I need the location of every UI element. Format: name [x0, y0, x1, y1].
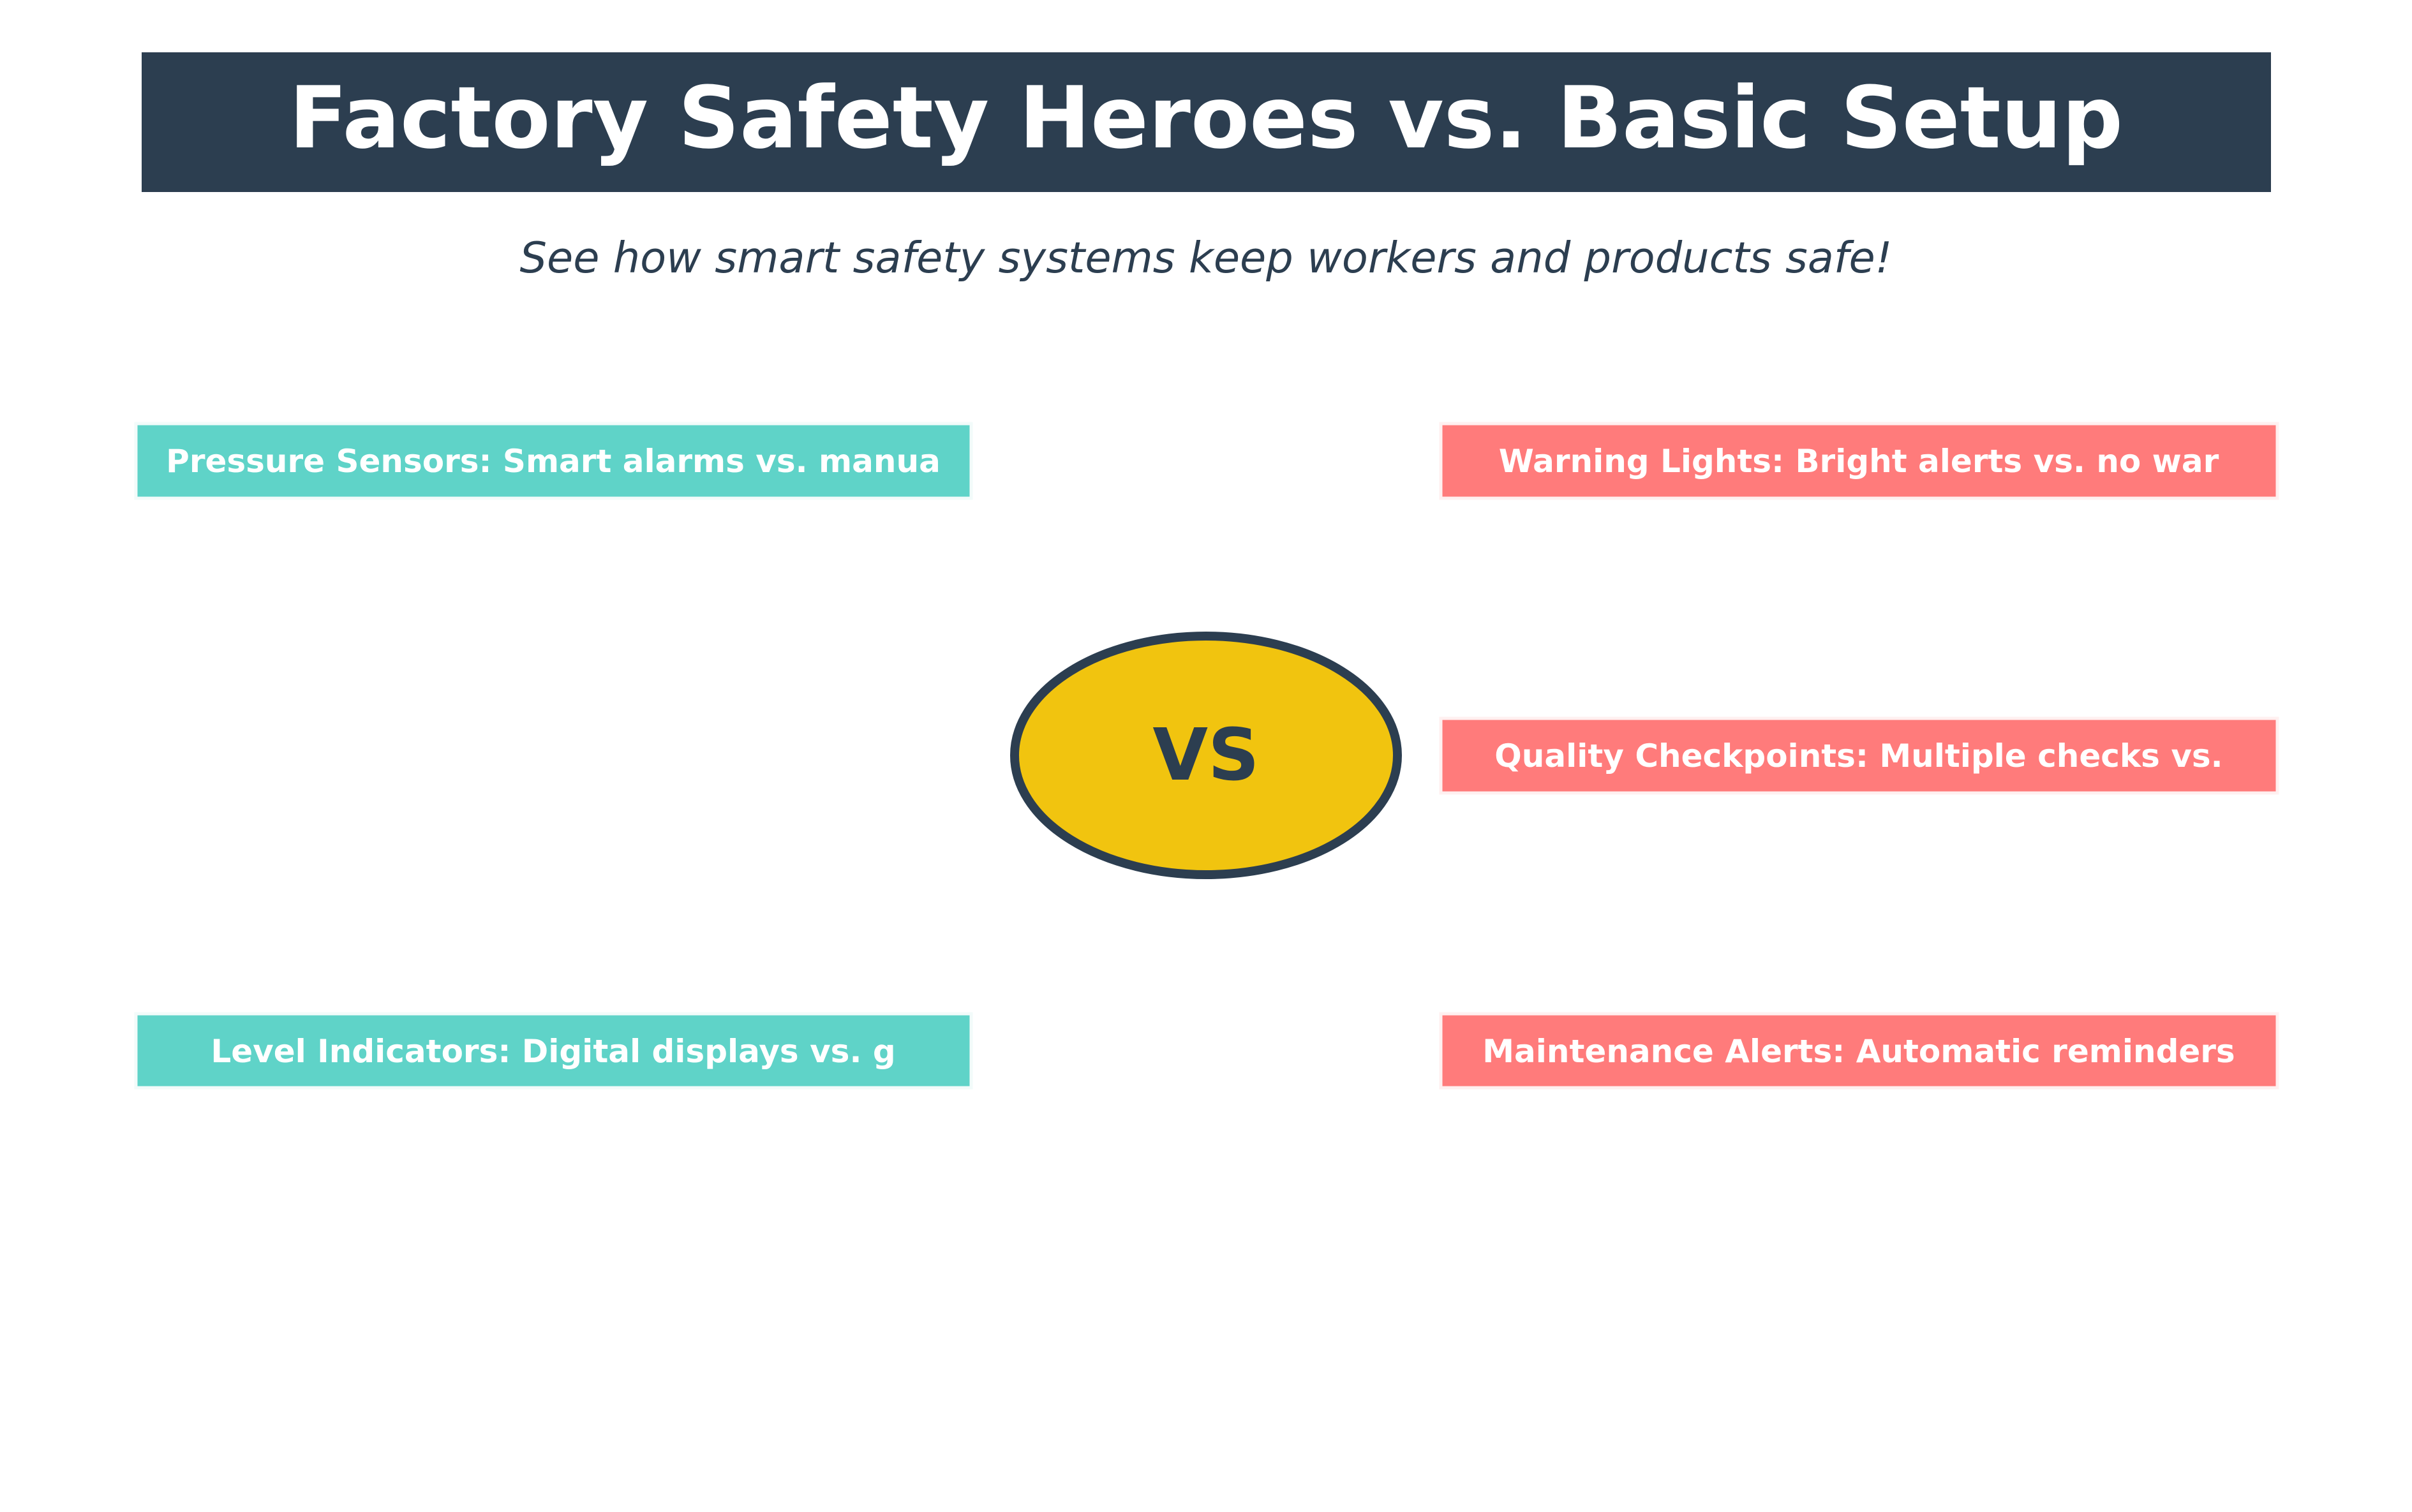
subtitle: See how smart safety systems keep workers and products safe! — [519, 233, 1893, 283]
label: level indicators — [136, 1014, 971, 1088]
label: warning lights — [1441, 424, 2277, 498]
title — [142, 52, 2271, 192]
panel: right labels — [1441, 424, 2277, 1088]
vs badge: VS — [1152, 714, 1260, 797]
label: quality checkpoints: Quality Checkpoints: Multiple checks vs. — [1494, 737, 2223, 775]
label: pressure sensors: Pressure Sensors: Smart alarms vs. manua — [166, 443, 941, 480]
label: maintenance alerts — [1441, 1014, 2277, 1088]
label: pressure sensors — [136, 424, 971, 498]
vs badge — [1015, 636, 1397, 875]
label: quality checkpoints — [1441, 718, 2277, 793]
panel: left labels — [136, 424, 971, 1088]
label: warning lights: Warning Lights: Bright alerts vs. no war — [1499, 443, 2219, 480]
title: Factory Safety Heroes vs. Basic Setup — [289, 68, 2123, 168]
label: level indicators: Level Indicators: Digital displays vs. g — [211, 1033, 896, 1070]
label: maintenance alerts: Maintenance Alerts: Automatic reminders — [1482, 1033, 2235, 1070]
